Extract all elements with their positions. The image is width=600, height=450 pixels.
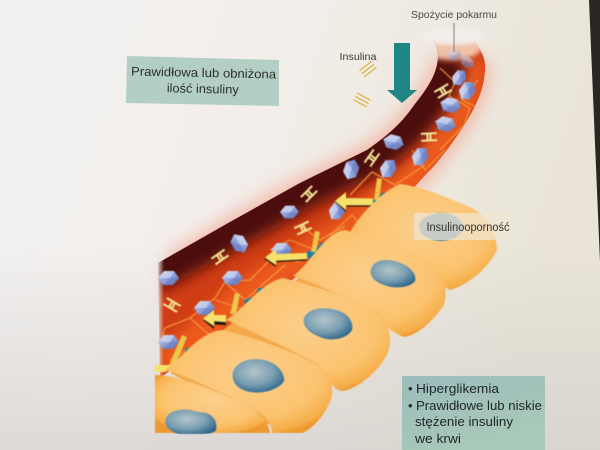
label: Spożycie pokarmu: Spożycie pokarmu: [411, 9, 497, 21]
cell 2: [293, 230, 446, 337]
bottom edge fade: [148, 434, 318, 450]
callout: insulin amount: Prawidłowa lub obniżona: [131, 64, 276, 82]
label: Spożycie pokarmu: [411, 9, 497, 52]
callout: hyperglycemia: stężenie insuliny: [415, 414, 514, 429]
label: Insulinooporność: [414, 213, 512, 240]
label: Insulina: Insulina: [340, 51, 377, 63]
cell 1: [350, 184, 497, 290]
arrow: teal insulin arrow: [387, 43, 417, 103]
panel: blood vessel: [140, 28, 500, 390]
free insulin molecules: [353, 61, 376, 107]
cell 4: [165, 330, 332, 433]
callout: hyperglycemia: [402, 376, 546, 450]
callout: insulin amount: ilość insuliny: [167, 81, 240, 97]
veins: [160, 68, 470, 360]
callout: hyperglycemia: •: [408, 381, 413, 396]
cell 3: [226, 278, 390, 391]
callout: hyperglycemia: •: [408, 398, 413, 413]
insulin molecules in vessel: [163, 84, 452, 312]
callout: hyperglycemia: Hiperglikemia: [416, 381, 500, 396]
glucose crystals: [158, 50, 479, 349]
cell 5: [155, 375, 270, 433]
callout: hyperglycemia: Prawidłowe lub niskie: [416, 398, 542, 413]
callout: insulin amount: [126, 56, 280, 106]
panel: cells: [155, 184, 497, 433]
yellow arrows: glucose transport blocked: [155, 178, 382, 372]
label: Insulinooporność: Insulinooporność: [426, 222, 510, 234]
cell nuclei: [165, 213, 463, 435]
callout: hyperglycemia: we krwi: [414, 431, 461, 446]
receptors: [172, 192, 392, 372]
